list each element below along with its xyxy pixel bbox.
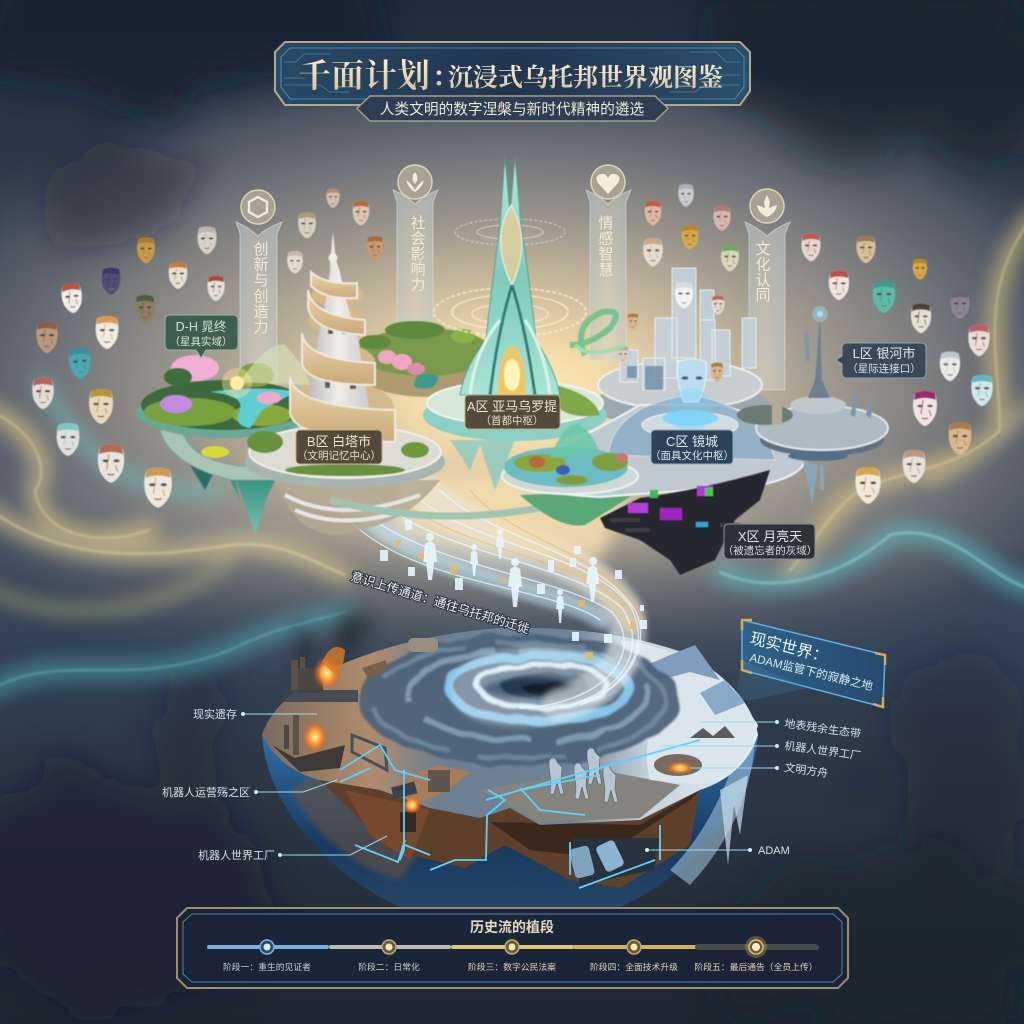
label: 运营区 xyxy=(162,780,337,799)
label: B: B区 白塔市 xyxy=(307,434,371,449)
island: B White Tower xyxy=(245,232,640,534)
label: 运营区: 机器人运营殇之区 xyxy=(162,785,250,799)
masks: left cluster xyxy=(32,189,383,508)
timeline stage labels xyxy=(223,961,818,972)
warm swirl under islands xyxy=(390,473,630,560)
pillar: 社会影响力: 会 xyxy=(410,230,426,247)
label: B: （文明记忆中心） xyxy=(297,449,381,462)
snowfield xyxy=(620,640,758,785)
pillar: 情感智慧: 慧 xyxy=(598,262,614,279)
pillar: 创新与创造力: 创 xyxy=(253,288,269,305)
label: L xyxy=(836,343,926,378)
pillar: 创新与创造力: 创 xyxy=(253,241,269,258)
timeline stage labels: 阶段四：全面技术升级 xyxy=(590,961,678,972)
ark vault xyxy=(569,838,660,885)
pillar: 社会影响力: 影 xyxy=(410,246,426,263)
island: C Mirror City xyxy=(502,359,806,526)
timeline stage labels: 阶段三：数字公民法案 xyxy=(468,961,556,972)
pillar: 文化认同 xyxy=(745,189,790,390)
pillar: 创新与创造力: 造 xyxy=(253,303,269,320)
island back: garden xyxy=(357,321,500,397)
label: A: A区 亚马乌罗提 xyxy=(467,399,557,414)
label: C: （面具文化中枢） xyxy=(650,449,734,462)
earth sphere xyxy=(262,735,758,932)
pillar: 情感智慧: 情 xyxy=(598,215,614,232)
callout: real world xyxy=(735,620,885,707)
pillar: 社会影响力: 响 xyxy=(410,261,426,278)
island: L Galaxy City xyxy=(737,306,888,505)
timeline panel xyxy=(177,908,848,988)
tower core xyxy=(305,232,372,425)
timeline stage labels: 阶段一：重生的见证者 xyxy=(223,961,311,972)
robots xyxy=(549,748,618,802)
pillar: 社会影响力: 社 xyxy=(410,215,426,232)
label: D-H: （星具实域） xyxy=(170,335,232,348)
energy wisps xyxy=(0,215,1024,690)
pillar: 文化认同: 化 xyxy=(755,256,771,273)
timeline stage labels: 阶段五：最后通告（全员上传） xyxy=(694,961,818,972)
tower back bands xyxy=(290,283,394,434)
pillar: 情感智慧: 智 xyxy=(598,245,614,263)
label: D-H xyxy=(165,315,238,358)
left ruins and factory xyxy=(272,638,470,832)
upload channel stream xyxy=(340,490,641,712)
timeline nodes xyxy=(260,936,767,958)
pillar: 创新与创造力: 与 xyxy=(253,272,269,289)
pillar: 文化认同: 同 xyxy=(755,287,771,304)
vortex xyxy=(360,634,680,766)
label: ADAM xyxy=(645,845,790,857)
value pillars xyxy=(236,165,790,400)
masks: right cluster xyxy=(643,184,993,504)
surface xyxy=(262,628,758,825)
pillar: 社会影响力 xyxy=(393,165,438,360)
title banner: 沉浸式乌托邦世界观图鉴 xyxy=(448,64,723,92)
label: C: C区 镜城 xyxy=(666,434,718,449)
pointer labels xyxy=(162,707,862,862)
label: 工厂 xyxy=(198,836,387,862)
pillar: 创新与创造力 xyxy=(236,190,282,400)
label: A xyxy=(465,395,560,429)
label: 机器人世界工厂: 机器人世界工厂 xyxy=(784,738,862,763)
crust cross-section xyxy=(310,770,702,888)
label: C xyxy=(650,430,734,464)
glowing network lines xyxy=(340,740,700,888)
label: A: （首都中枢） xyxy=(480,414,544,427)
pillar: 创新与创造力: 新 xyxy=(253,257,269,274)
label: 工厂: 机器人世界工厂 xyxy=(198,848,275,862)
label: X xyxy=(723,524,817,559)
label: B xyxy=(296,430,382,464)
label: 现实遗存 xyxy=(193,707,317,721)
island: C back mirror platform xyxy=(570,268,770,427)
island back: D-H realm xyxy=(137,344,335,535)
label: 地表残余生态带: 地表残余生态带 xyxy=(784,716,862,741)
pillar: 情感智慧 xyxy=(586,165,631,360)
heading: 千面计划 xyxy=(298,58,430,95)
label: L: L区 银河市 xyxy=(853,346,915,361)
label: X: X区 月亮天 xyxy=(738,529,802,544)
pillar: 创新与创造力: 力 xyxy=(253,319,269,336)
pillar: 文化认同: 认 xyxy=(755,272,771,289)
label: X: （被遗忘者的灰域） xyxy=(723,544,817,557)
label: 地表残余生态带 xyxy=(700,716,862,741)
tower spiral ribbons xyxy=(290,272,395,442)
label: 文明方舟 xyxy=(690,760,829,780)
label: 文明方舟: 文明方舟 xyxy=(784,760,829,780)
timeline stage labels: 阶段二：日常化 xyxy=(358,961,420,972)
pillar: 社会影响力: 力 xyxy=(410,277,426,294)
island: X Moonlit dark zone xyxy=(600,470,770,575)
timeline title: 历史流的植段 xyxy=(470,919,554,935)
label: L: （星际连接口） xyxy=(847,362,921,375)
island: A Amaurot spire xyxy=(423,157,607,490)
zone labels xyxy=(165,315,926,559)
title banner xyxy=(275,42,750,121)
pillar: 情感智慧: 感 xyxy=(598,231,614,248)
reality world planet xyxy=(262,615,758,932)
callout: real world: 现实世界： xyxy=(748,629,830,666)
pillar: 文化认同: 文 xyxy=(755,241,771,258)
data fragments: amber xyxy=(395,540,635,660)
stone plate xyxy=(480,770,680,822)
title banner: ： xyxy=(432,63,458,92)
timeline track xyxy=(209,945,816,949)
subtitle plaque xyxy=(357,96,668,121)
uploading figures and data fragments xyxy=(380,519,647,643)
label: ADAM: ADAM xyxy=(758,845,790,857)
smoke xyxy=(297,615,373,672)
label: 机器人世界工厂 xyxy=(660,738,862,763)
tagline: upload channel: 意识上传通道：通往乌托邦的迁徙 xyxy=(349,569,531,636)
callout: real world: ADAM监管下的寂静之地 xyxy=(748,650,875,693)
subtitle plaque: 人类文明的数字涅槃与新时代精神的遴选 xyxy=(380,101,644,118)
label: D-H: D-H 晁终 xyxy=(176,319,227,334)
label: 现实遗存: 现实遗存 xyxy=(193,707,237,721)
